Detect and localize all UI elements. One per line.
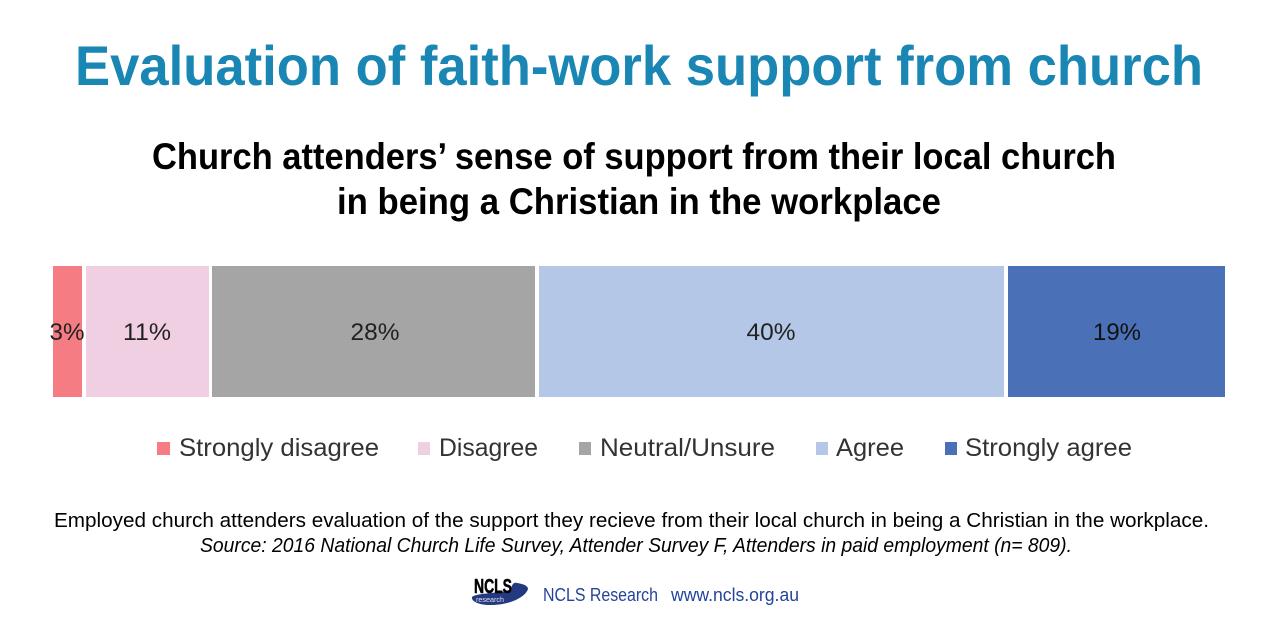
legend item: disagree: Disagree [439,434,538,462]
stacked bar chart [50,266,1225,397]
source citation: Source: 2016 National Church Life Survey, Attender Survey F, Attenders in paid employment (n= 809). [200,535,1072,557]
legend item: agree: Agree [836,434,904,462]
footer website: www.ncls.org.au [670,585,799,605]
footnote description: Employed church attenders evaluation of the support they recieve from their local church in being a Christian in the workplace. [54,510,1209,532]
segment: neutral/unsure 28%: 28% [350,319,400,346]
legend [157,434,1132,462]
segment: strongly agree 19% [1008,266,1225,397]
footer organisation name: NCLS Research [543,585,658,605]
segment: strongly disagree 3%: 3% [50,319,84,346]
logo: NCLS research: research [476,597,504,604]
subtitle: Church attenders’ sense of support from their local church [152,136,1116,177]
legend item: strongly disagree: Strongly disagree [179,434,379,462]
segment: neutral/unsure 28% [212,266,535,397]
legend item: strongly agree: Strongly agree [965,434,1132,462]
segment: agree 40% [539,266,1004,397]
subtitle [152,136,1116,222]
title: Evaluation of faith-work support from church [75,34,1203,97]
segment: agree 40%: 40% [746,319,796,346]
segment: strongly disagree 3% [50,266,84,397]
legend item: neutral/unsure: Neutral/Unsure [600,434,775,462]
subtitle: in being a Christian in the workplace [337,181,941,222]
segment: strongly agree 19%: 19% [1093,319,1141,346]
logo: NCLS research: NCLS [474,576,512,598]
segment: disagree 11%: 11% [123,319,171,346]
segment: disagree 11% [86,266,209,397]
